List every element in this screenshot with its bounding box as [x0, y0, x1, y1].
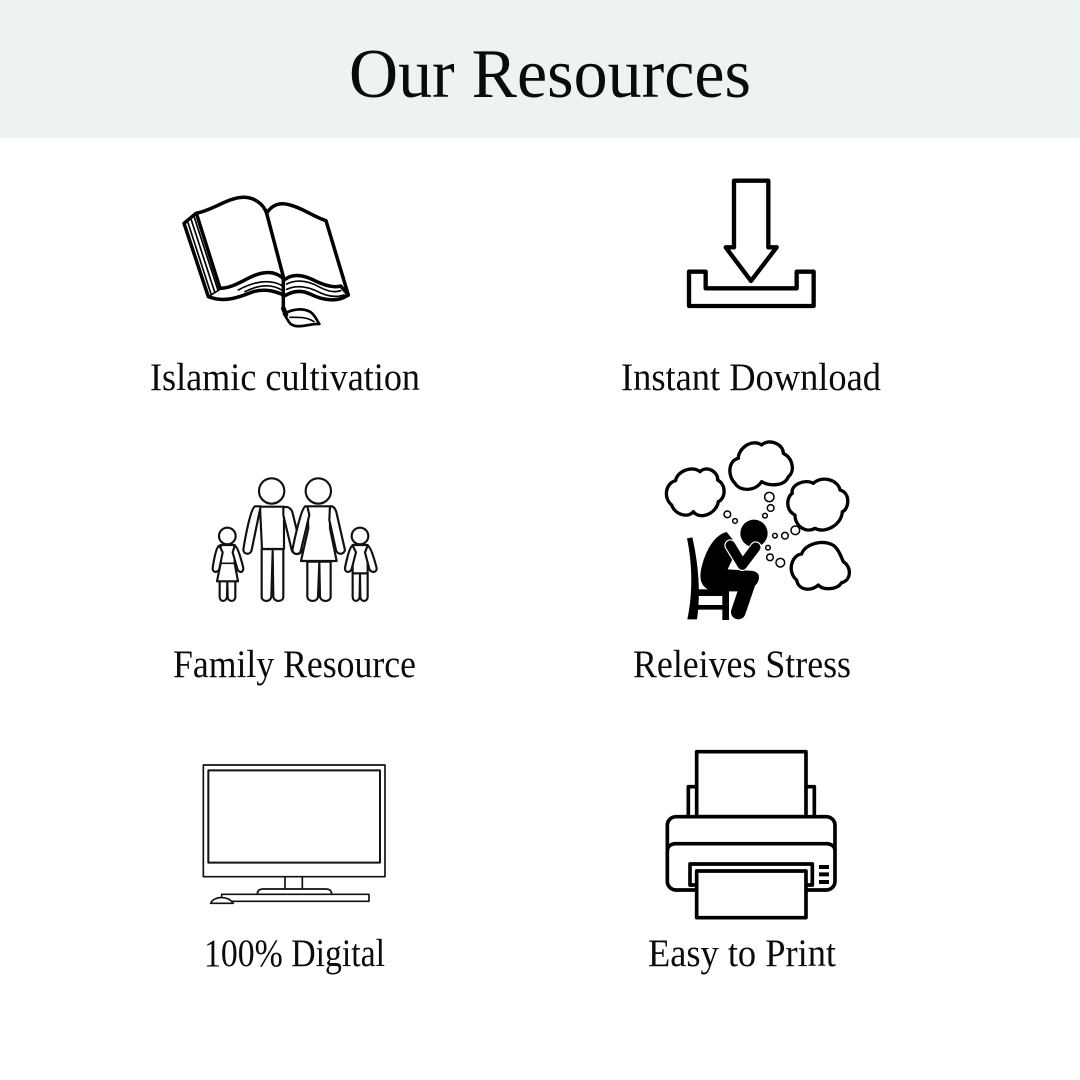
thought bubbles: [724, 492, 800, 567]
thought clouds: [666, 442, 849, 589]
icon: open book: [184, 197, 348, 326]
panel: Islamic cultivation: [150, 197, 420, 399]
panel: Family Resource: [173, 478, 416, 686]
label: Instant Download: Instant Download: [621, 356, 881, 399]
icon: desktop monitor: [203, 765, 385, 903]
label: Easy to Print: Easy to Print: [648, 932, 836, 975]
panel: 100% Digital: [203, 765, 385, 975]
header band: [0, 0, 1080, 138]
icon: printer: [667, 752, 835, 918]
label: Islamic cultivation: Islamic cultivation: [150, 356, 420, 399]
panel: Releives Stress: [633, 442, 851, 686]
panel: Instant Download: [621, 181, 881, 399]
title: Our Resources: [349, 36, 751, 113]
label: 100% Digital: 100% Digital: [204, 932, 385, 975]
label: Releives Stress: Releives Stress: [633, 643, 851, 686]
panel: Easy to Print: [648, 752, 836, 975]
icon: family of four: [213, 478, 377, 601]
label: Family Resource: Family Resource: [173, 643, 416, 686]
icon: download arrow into tray: [689, 181, 814, 306]
seated figure: [700, 520, 768, 612]
chair: [687, 537, 729, 620]
icon: stressed person with thought clouds: [666, 442, 849, 620]
